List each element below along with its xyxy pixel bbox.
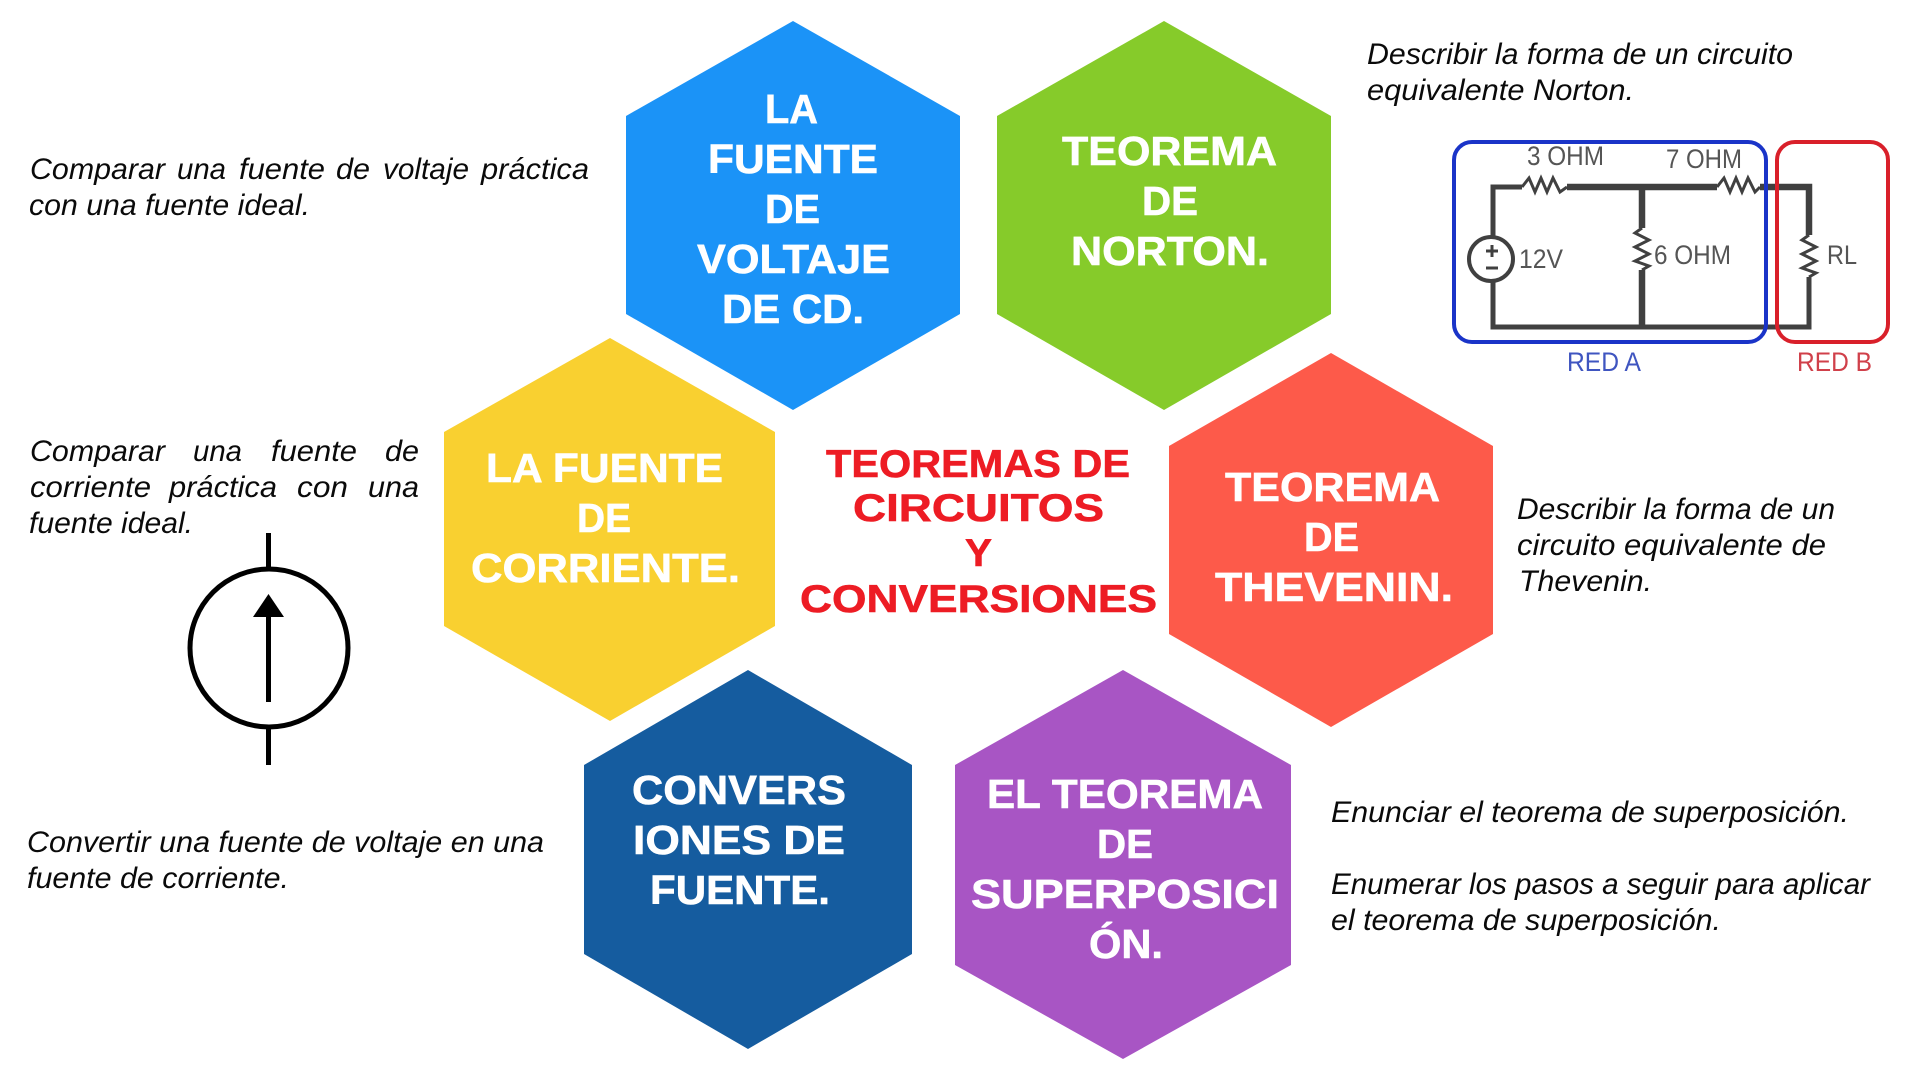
hexagon: Teorema de Thevenin: DE: [1304, 514, 1359, 560]
text: objetivo fuente de corriente: fuente ideal.: [29, 507, 193, 540]
diagram: Thevenin/Norton circuit with networks A and B: 3 OHM: [1527, 141, 1604, 171]
hexagon: La fuente de voltaje de CD: VOLTAJE: [697, 236, 890, 282]
hexagon: La fuente de corriente: LA FUENTE: [486, 445, 723, 491]
text: objetivo fuente de voltaje: práctica: [480, 153, 589, 186]
text: objetivo fuente de voltaje: de: [336, 153, 370, 186]
hexagon: El teorema de superposicion: ÓN.: [1089, 921, 1163, 967]
text: objetivo Norton: equivalente Norton.: [1367, 74, 1634, 107]
hexagon: Conversiones de fuente: [584, 670, 912, 1049]
text: objetivo fuente de corriente: Comparar: [30, 435, 166, 468]
hexagon: La fuente de voltaje de CD: [626, 21, 960, 410]
hexagon: Teorema de Norton: DE: [1142, 178, 1198, 224]
hexagon: Conversiones de fuente: CONVERS: [632, 767, 846, 813]
text: objetivo fuente de corriente: una: [193, 435, 242, 468]
text: objetivo fuente de voltaje: Comparar: [30, 153, 166, 186]
text: objetivo fuente de corriente: práctica: [168, 471, 277, 504]
title: Teoremas de circuitos y conversiones: Y: [965, 532, 992, 575]
hexagon: Teorema de Norton: NORTON.: [1071, 228, 1269, 274]
text: objetivos superposicion: Enunciar el teorema de superposición.: [1331, 796, 1849, 829]
diagram: Thevenin/Norton circuit with networks A and B: 7 OHM: [1666, 144, 1742, 174]
text: objetivo Thevenin: Thevenin.: [1519, 565, 1652, 598]
text: objetivo fuente de voltaje: con una fuente ideal.: [29, 189, 310, 222]
hexagon: El teorema de superposicion: [955, 670, 1291, 1059]
text: objetivo Thevenin: [1517, 493, 1835, 598]
hexagon: Conversiones de fuente: FUENTE.: [650, 867, 830, 913]
title: Teoremas de circuitos y conversiones: TEOREMAS DE: [826, 443, 1130, 486]
text: objetivo Norton: Describir la forma de un circuito: [1367, 38, 1793, 71]
hexagon: El teorema de superposicion: SUPERPOSICI: [971, 871, 1279, 917]
text: objetivos superposicion: el teorema de superposición.: [1331, 904, 1721, 937]
hexagon: Teorema de Norton: TEOREMA: [1062, 128, 1277, 174]
hexagon: Teorema de Thevenin: [1169, 353, 1493, 727]
diagram: Thevenin/Norton circuit with networks A and B: RED B: [1797, 347, 1872, 377]
hexagon: Teorema de Norton: [997, 21, 1331, 410]
hexagon: La fuente de voltaje de CD: DE: [765, 186, 820, 232]
text: objetivo conversiones de fuente: fuente de corriente.: [27, 862, 289, 895]
hexagon: Teorema de Thevenin: TEOREMA: [1225, 464, 1440, 510]
title: Teoremas de circuitos y conversiones: [800, 443, 1157, 621]
text: objetivos superposicion: Enumerar los pasos a seguir para aplicar: [1331, 868, 1871, 901]
hexagon: La fuente de corriente: DE: [577, 495, 631, 541]
hexagon: Conversiones de fuente: IONES DE: [633, 817, 845, 863]
title: Teoremas de circuitos y conversiones: CIRCUITOS: [853, 487, 1104, 530]
diagram: Thevenin/Norton circuit with networks A and B: 12V: [1519, 244, 1563, 274]
text: objetivo fuente de corriente: corriente: [30, 471, 151, 504]
hexagon: La fuente de corriente: CORRIENTE.: [471, 545, 740, 591]
text: objetivo fuente de voltaje: voltaje: [383, 153, 469, 186]
text: objetivo fuente de corriente: fuente: [271, 435, 357, 468]
hexagon: La fuente de voltaje de CD: FUENTE: [708, 136, 878, 182]
text: objetivos superposicion: [1331, 796, 1871, 937]
text: objetivo conversiones de fuente: [27, 826, 544, 895]
hexagon: La fuente de voltaje de CD: DE CD.: [722, 286, 864, 332]
diagram: Thevenin/Norton circuit with networks A and B: RL: [1827, 240, 1857, 270]
text: objetivo fuente de corriente: de: [385, 435, 419, 468]
diagram: Thevenin/Norton circuit with networks A and B: 6 OHM: [1654, 240, 1731, 270]
hexagon: La fuente de corriente: [444, 338, 775, 721]
diagram: Thevenin/Norton circuit with networks A and B: [1454, 141, 1888, 377]
hexagon: La fuente de voltaje de CD: LA: [765, 86, 818, 132]
icon: current source symbol: [190, 533, 348, 765]
text: objetivo fuente de corriente: [29, 435, 419, 540]
hexagon: El teorema de superposicion: EL TEOREMA: [987, 771, 1263, 817]
text: objetivo fuente de corriente: con: [297, 471, 348, 504]
text: objetivo conversiones de fuente: Convertir una fuente de voltaje en una: [27, 826, 544, 859]
text: objetivo Thevenin: circuito equivalente de: [1517, 529, 1826, 562]
text: objetivo Norton: [1367, 38, 1793, 107]
text: objetivo Thevenin: Describir la forma de un: [1517, 493, 1835, 526]
text: objetivo fuente de voltaje: [29, 153, 589, 222]
title: Teoremas de circuitos y conversiones: CONVERSIONES: [800, 578, 1157, 621]
text: objetivo fuente de corriente: una: [368, 471, 419, 504]
hexagon: El teorema de superposicion: DE: [1097, 821, 1153, 867]
diagram: Thevenin/Norton circuit with networks A and B: RED A: [1567, 347, 1641, 377]
text: objetivo fuente de voltaje: una: [177, 153, 226, 186]
text: objetivo fuente de voltaje: fuente: [239, 153, 325, 186]
hexagon: Teorema de Thevenin: THEVENIN.: [1215, 564, 1453, 610]
